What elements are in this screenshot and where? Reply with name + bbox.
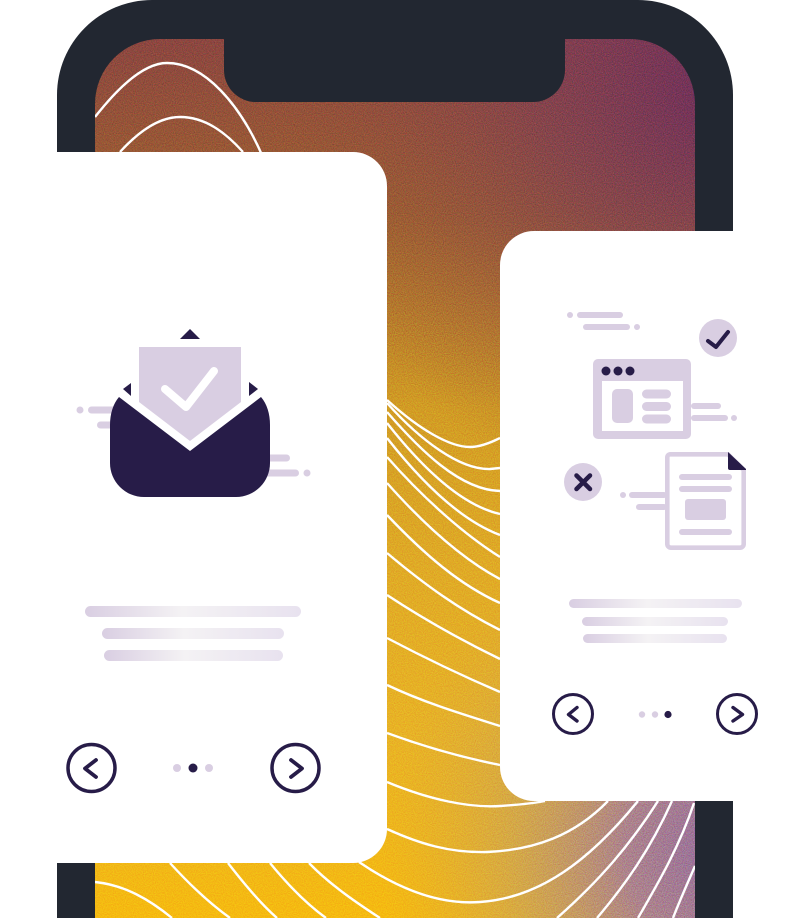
icon: cross badge [564,463,602,501]
icon: document [620,452,746,548]
icon: open envelope with check [76,329,310,497]
icon: speed lines top [567,312,640,330]
phone screen with gradient and contour lines [95,39,695,918]
right card [500,231,810,801]
left card [0,152,387,863]
navigation: previous, dots, next [68,744,319,792]
text placeholder bars [569,599,742,643]
icon: check badge [699,319,737,357]
navigation: previous, dots, next [554,694,756,734]
text placeholder bars [85,606,301,661]
icon: browser window [593,359,737,439]
